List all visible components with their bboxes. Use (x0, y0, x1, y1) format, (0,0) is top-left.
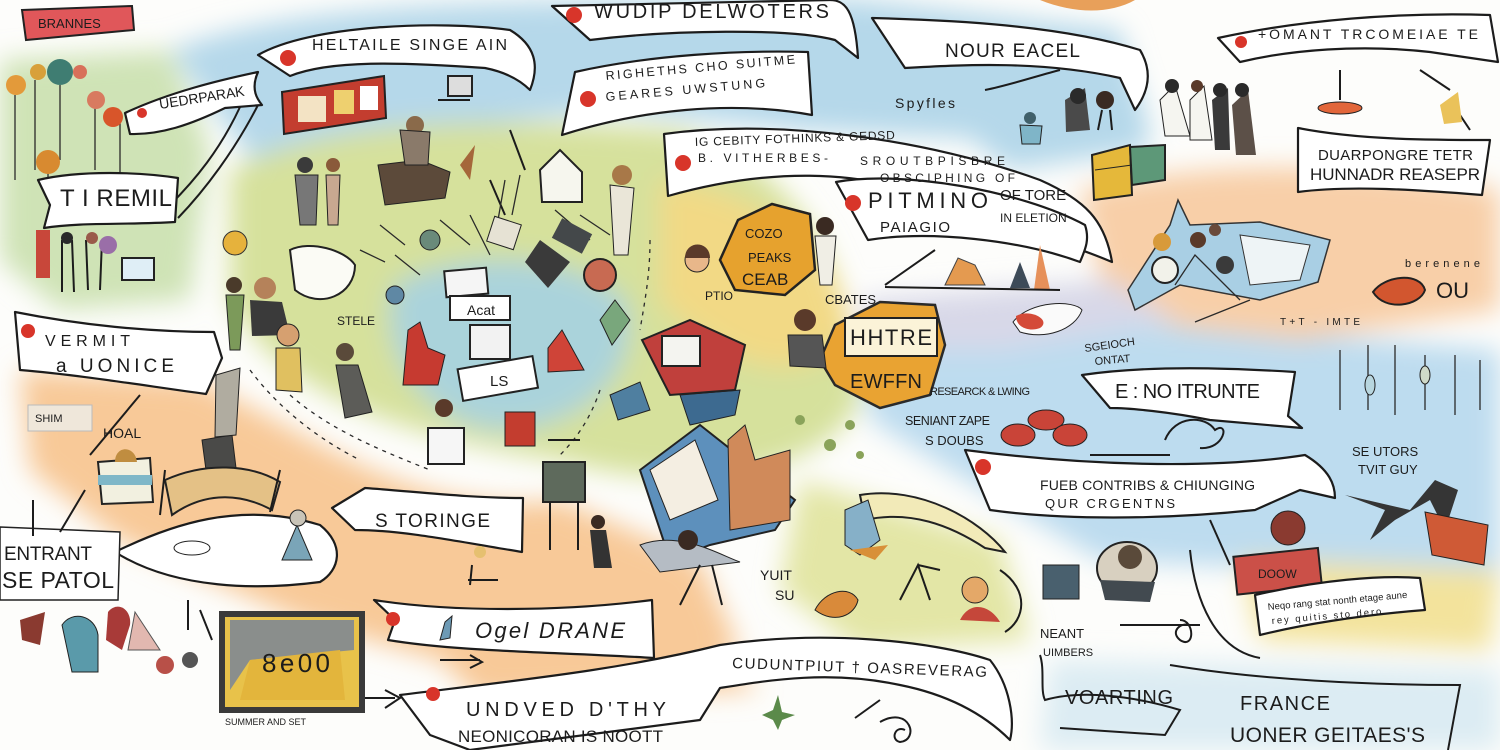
banner: upper left (125, 72, 262, 218)
orange round badge center: EWFFN (850, 371, 922, 393)
banner: top right: +OMANT TRCOMEIAE TE (1258, 26, 1478, 42)
chalkboard frame: 8e00 (262, 648, 330, 678)
banner: NOUR EACEL (872, 18, 1148, 111)
banner: long center (664, 128, 1112, 262)
banner: INVERMIT A UONICE: a UONICE (56, 356, 174, 377)
icon group: balloons on poles (6, 59, 123, 190)
icon and text: orange bean OU: OU (1436, 278, 1469, 303)
small scene: figures and head (760, 565, 1021, 632)
banner: PITMINO: OF TORE (1000, 187, 1066, 204)
bench and desk (98, 449, 280, 515)
red object near center (1013, 304, 1082, 335)
figure beside hexagon (685, 217, 836, 303)
machines and bots: UIMBERS (1043, 647, 1093, 659)
center cards cluster: LS (490, 373, 508, 390)
banner: INVERMIT A UONICE (15, 312, 222, 394)
banner: bottom center wide: UNDVED D'THY (466, 699, 666, 721)
banner: upper left: UEDRPARAK (158, 83, 246, 112)
group of people top right (1160, 79, 1256, 155)
icon and text: orange bean OU: berenene (1405, 258, 1480, 270)
orange city skyline (885, 245, 1060, 290)
orange hexagon badge top: CEAB (742, 270, 788, 289)
label: NEWCOBE etc: SENIANT ZAPE (905, 414, 990, 428)
label: NEWCOBE etc: ONTAT (1094, 353, 1131, 368)
banner: PITMINO: PITMINO (868, 188, 988, 213)
banner: small ribbon scroll: Neqo rang stat nonth etage aune (1267, 590, 1408, 613)
small scene: figures and head: YUIT (760, 567, 792, 583)
small note and hat building: SHIM (35, 413, 62, 425)
banner: small ribbon scroll: rey quitis sto dero (1271, 606, 1382, 627)
label: NEWCOBE etc (905, 336, 1136, 448)
label: NEWCOBE etc: RESEARCK & LWING (930, 386, 1030, 398)
banner: FUEL CONTRIS (965, 450, 1335, 518)
banner: FUEL CONTRIS: FUEB CONTRIBS & CHIUNGING (1040, 477, 1255, 493)
text block: FRANCE UONER GEITAES (1170, 665, 1460, 750)
seated figures left center (226, 277, 464, 464)
banner: DUARONGRE: HUNNADR REASEPR (1310, 165, 1480, 184)
red machine box: DOOW (1258, 567, 1297, 581)
label near badge: CBATES (825, 292, 876, 307)
banner: bottom center wide: NEONICORAN IS NOOTT (458, 727, 663, 746)
small scene: figures and head: SU (775, 587, 794, 603)
central sketch cluster (223, 116, 634, 299)
banner: PITMINO: IN ELETION (1000, 211, 1067, 225)
chalkboard frame: SUMMER AND SET (225, 717, 307, 727)
banner: E INO ITRUNTE (1082, 368, 1302, 428)
banner: long center: IG CEBITY FOTHINKS & GEDSD (695, 128, 895, 149)
banner: long center: SROUTBPISBRE (860, 154, 1005, 168)
orange round badge center (820, 302, 945, 408)
map area: upper right: T+T - IMTE (1280, 317, 1360, 328)
icon and text: orange bean OU (1373, 258, 1480, 305)
banner: top left sign: BRANNES (38, 16, 101, 31)
banner: Ogel DRANE: Ogel DRANE (475, 618, 625, 643)
red boxing gloves (1001, 410, 1223, 455)
banner: ENTRANT SE PATOL: SE PATOL (2, 567, 114, 593)
banner: TIREMIL: T I REMIL (60, 185, 172, 212)
icon: star leaf and spiral (762, 695, 910, 742)
label near badge (788, 292, 876, 368)
banner: WUDIP DELWOTERS (552, 0, 858, 58)
banner: VOARTING: VOARTING (1065, 687, 1173, 709)
banner: bottom center wide: CUDUNTPIUT † OASREVERAG (732, 655, 987, 681)
banner: second center: RIGHETHS CHO SUITME (605, 52, 796, 83)
banner: NOUR EACEL: Spyfles (895, 95, 955, 111)
orange round badge center: HHTRE (850, 325, 932, 350)
banner: VOARTING (1040, 655, 1180, 735)
blue panel with buildings (640, 425, 795, 605)
small note and hat building: HOAL (103, 425, 141, 441)
machines and bots: NEANT (1040, 626, 1084, 641)
stand and people (468, 440, 612, 585)
banner: ENTRANT SE PATOL (0, 490, 120, 600)
banner: top right (1218, 14, 1498, 62)
text block: FRANCE UONER GEITAES: FRANCE (1240, 693, 1330, 715)
text block: FRANCE UONER GEITAES: UONER GEITAES'S (1230, 724, 1425, 747)
banner: second center (562, 52, 812, 135)
banner: ENTRANT SE PATOL: ENTRANT (4, 544, 92, 565)
colored boxes (1092, 145, 1165, 200)
banner: PITMINO (836, 171, 1087, 262)
center cards cluster: Acat (467, 302, 495, 318)
scattered doodles around center (250, 175, 864, 470)
icon: red storefront (282, 76, 386, 134)
red machine box (1190, 511, 1322, 658)
label and black birds right (1345, 444, 1488, 565)
label: NEWCOBE etc: S DOUBS (925, 433, 984, 448)
people left (36, 230, 154, 292)
banner: Ogel DRANE (374, 600, 654, 658)
banner: top left sign (22, 6, 134, 40)
banner: PITMINO: OBSCIPHING OF (880, 171, 1015, 185)
banner: E INO ITRUNTE: E : NO ITRUNTE (1115, 381, 1260, 403)
label and black birds right: TVIT GUY (1358, 462, 1418, 477)
seated figures left center: STELE (337, 314, 375, 328)
label and black birds right: SE UTORS (1352, 444, 1419, 459)
right vertical bars (1340, 345, 1480, 415)
orange hexagon badge top: PEAKS (748, 250, 792, 265)
banner: second center: GEARES UWSTUNG (605, 76, 766, 104)
center cards cluster (403, 240, 745, 446)
chalkboard frame (222, 614, 362, 727)
banner: DUARONGRE (1298, 128, 1490, 195)
banner: PITMINO: PAIAGIO (880, 219, 950, 236)
banner: STORINGE (332, 488, 523, 552)
banner: HELTALE SINGE: HELTAILE SINGE AIN (312, 37, 507, 54)
banner: long center: B. VITHERBES- (698, 151, 828, 165)
orange hexagon badge top (720, 204, 815, 295)
icon: lamp base (1318, 70, 1470, 130)
people near blue area (1020, 88, 1114, 144)
banner: white ellipse blob (115, 510, 337, 586)
small note and hat building (28, 368, 240, 470)
label: NEWCOBE etc: SGEIOCH (1084, 336, 1136, 355)
map area: upper right (1128, 200, 1360, 328)
icon: small laptop (438, 76, 472, 100)
icon group: bottom left figures (20, 600, 212, 674)
machines and bots (1040, 542, 1200, 659)
figure beside hexagon: PTIO (705, 289, 733, 303)
banner: INVERMIT A UONICE: VERMIT (45, 333, 130, 350)
banner: FUEL CONTRIS: QUR CRGENTNS (1045, 496, 1175, 511)
curved ribbon right of panel (845, 493, 1005, 560)
orange figure top (1040, 0, 1135, 10)
banner: small ribbon scroll (1255, 577, 1425, 635)
banner: NOUR EACEL: NOUR EACEL (945, 41, 1080, 62)
banner: DUARONGRE: DUARPONGRE TETR (1318, 147, 1473, 164)
banner: HELTALE SINGE (258, 25, 535, 90)
banner: STORINGE: S TORINGE (375, 511, 490, 532)
banner: TIREMIL (38, 173, 178, 228)
orange hexagon badge top: COZO (745, 226, 783, 241)
banner: bottom center wide (365, 638, 1012, 750)
banner: WUDIP DELWOTERS: WUDIP DELWOTERS (594, 1, 829, 23)
